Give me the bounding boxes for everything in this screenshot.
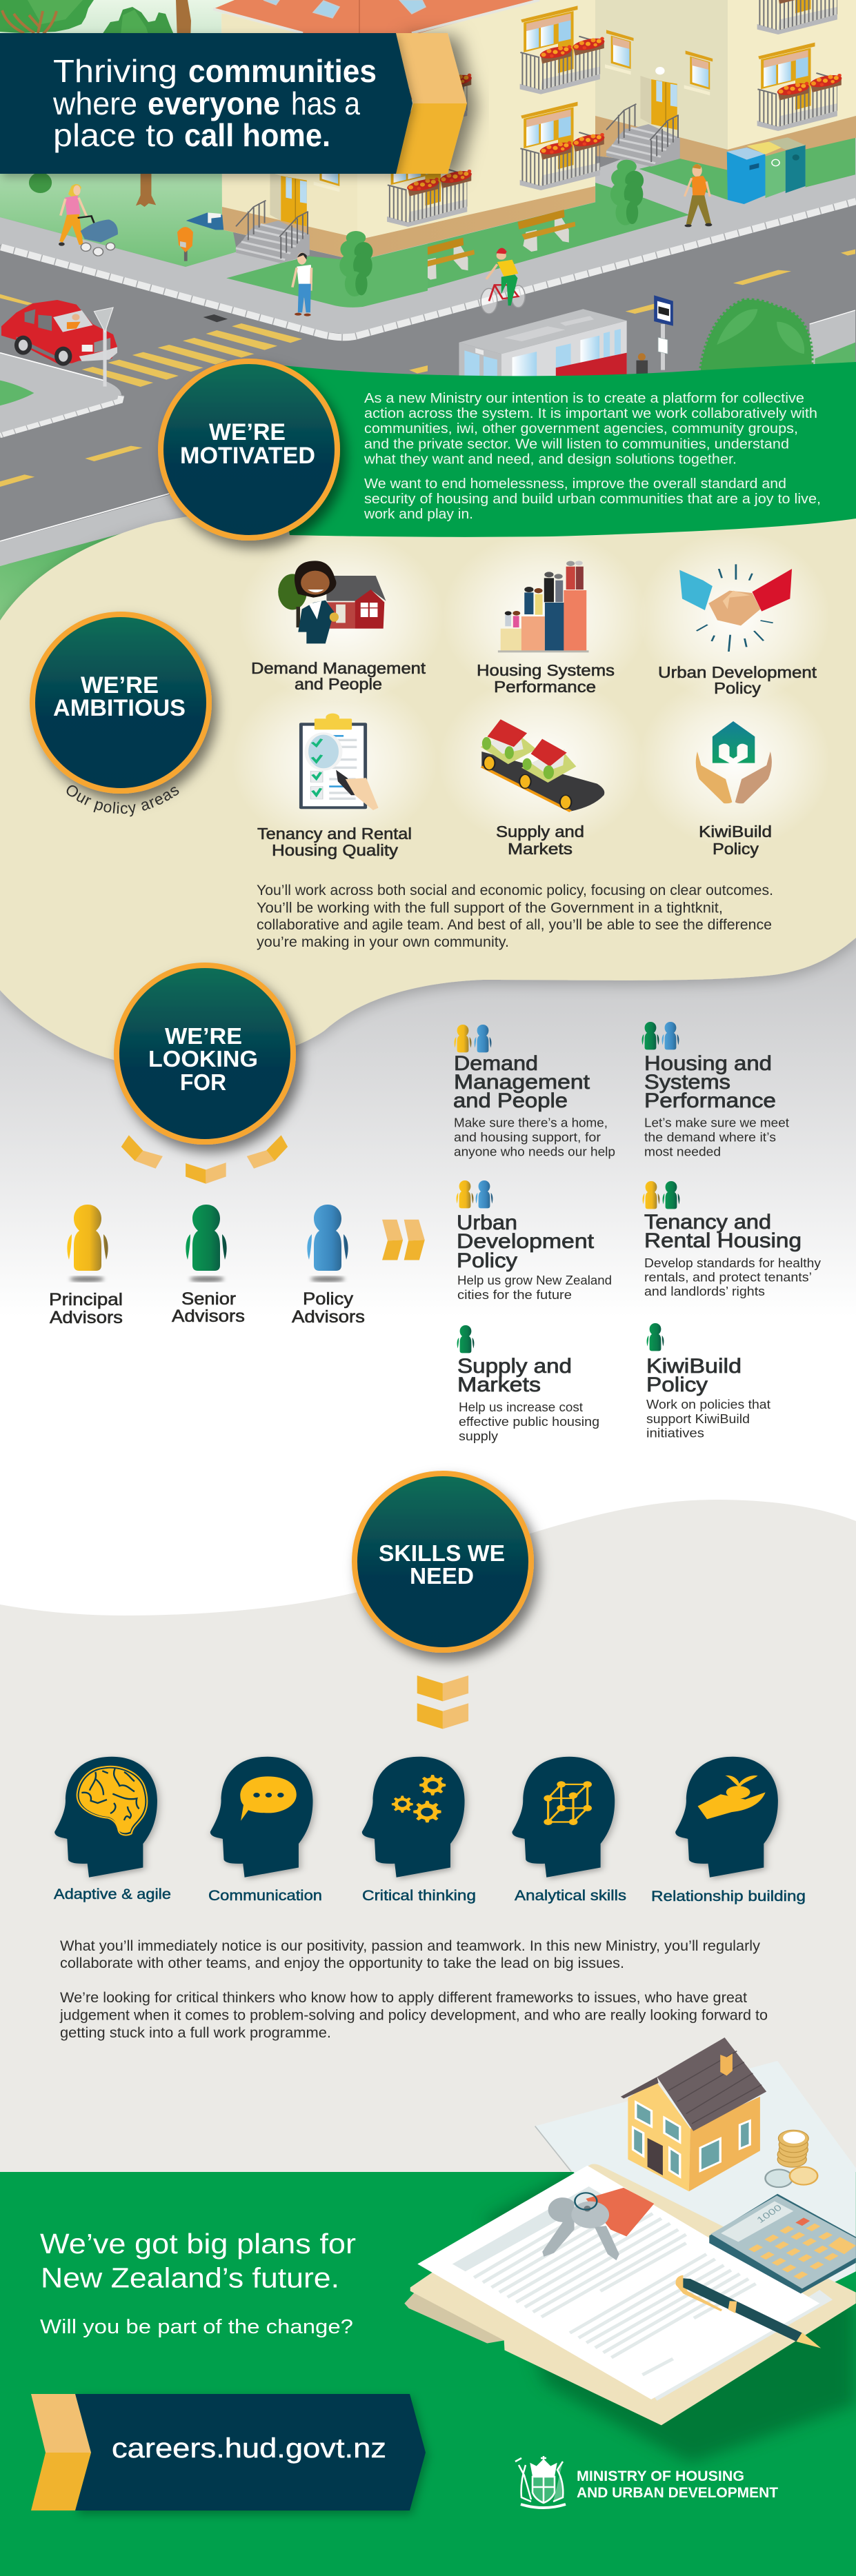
left entrance with steps xyxy=(236,172,310,263)
logo: ministry of housing and urban development xyxy=(515,2456,778,2508)
policy area labels xyxy=(251,659,817,859)
lower-left sidewalk edge xyxy=(0,494,169,541)
street scene illustration xyxy=(0,0,856,566)
motivated body text: what they want and need, and design solutions together. xyxy=(364,452,737,467)
circle: skills we need xyxy=(355,1473,531,1650)
role: demand management and people: anyone who needs our help xyxy=(454,1145,615,1158)
role: kiwibuild policy xyxy=(646,1323,770,1440)
role: tenancy and rental housing: Rental Housing xyxy=(644,1229,802,1252)
icon: clipboard with magnifier xyxy=(299,714,379,810)
skill heads xyxy=(54,1757,778,1878)
house model xyxy=(621,2037,766,2191)
advisor figures xyxy=(67,1205,348,1282)
motivated body text: security of housing and build urban communities that are a joy to live, xyxy=(364,492,821,507)
ambitious body text: you’re making in your own community. xyxy=(257,934,509,950)
skills body text: What you’ll immediately notice is our positivity, passion and teamwork. In this new Ministry, you’ll regularly xyxy=(60,1938,761,1954)
footer text: big plans: Will you be part of the change? xyxy=(40,2316,353,2338)
circle: we're looking for: LOOKING xyxy=(148,1046,258,1071)
advisor labels: Principal xyxy=(49,1290,123,1309)
balconies and windows xyxy=(387,0,843,227)
role: tenancy and rental housing xyxy=(643,1181,821,1298)
folder xyxy=(404,2164,856,2425)
standing man xyxy=(292,252,312,316)
skills body text xyxy=(59,1938,768,2041)
advisor labels: Senior xyxy=(181,1289,236,1309)
illustration: house, keys, documents, calculator xyxy=(404,2037,856,2425)
motivated body text: We want to end homelessness, improve the overall standard and xyxy=(364,476,786,492)
head: molecule cube xyxy=(512,1757,615,1878)
policy area labels: Markets xyxy=(508,840,573,858)
circle: we're ambitious: AMBITIOUS xyxy=(53,695,186,721)
upper sidewalk xyxy=(0,69,856,335)
light grey wave background xyxy=(0,1500,856,2172)
role: housing and systems performance: Performance xyxy=(644,1089,776,1112)
skill labels xyxy=(54,1886,806,1904)
left corner sidewalk xyxy=(0,353,121,438)
policy area labels: Demand Management xyxy=(251,659,426,677)
upper lawn xyxy=(0,174,237,267)
storm grate xyxy=(203,314,228,322)
blue utility hatch xyxy=(186,212,223,230)
circle: we're ambitious xyxy=(32,614,209,791)
role: supply and markets: supply xyxy=(459,1429,498,1443)
head: gears xyxy=(362,1757,465,1878)
ministry wordmark: AND URBAN DEVELOPMENT xyxy=(577,2485,778,2501)
arrows: stacked gold chevrons xyxy=(417,1676,468,1729)
skills body text: We’re looking for critical thinkers who know how to apply different frameworks to issues, who have great xyxy=(60,1990,747,2006)
conifer shrub xyxy=(610,160,644,225)
role: kiwibuild policy: Work on policies that xyxy=(646,1398,770,1411)
head: adaptive xyxy=(54,1757,157,1878)
role: tenancy and rental housing: and landlords’ rights xyxy=(644,1285,765,1298)
advisor labels: Advisors xyxy=(172,1307,245,1326)
role: kiwibuild policy: KiwiBuild xyxy=(646,1355,741,1378)
role: urban development policy: Development xyxy=(457,1230,595,1253)
role: housing and systems performance: Let’s make sure we meet xyxy=(644,1116,789,1129)
banner body xyxy=(0,33,412,174)
role: demand management and people: and People xyxy=(453,1089,568,1112)
scene details right half xyxy=(387,0,855,377)
bus xyxy=(459,309,627,377)
role: urban development policy: Help us grow New Zealand xyxy=(457,1274,612,1287)
conifer shrub xyxy=(339,231,373,296)
ministry wordmark: MINISTRY OF HOUSING xyxy=(577,2468,744,2484)
pale backing sheet xyxy=(535,2061,856,2340)
icon: brain xyxy=(77,1767,147,1835)
skill labels: Adaptive & agile xyxy=(54,1886,171,1902)
tree trunk and shrub xyxy=(29,172,156,207)
far sidewalk xyxy=(810,310,855,377)
role: supply and markets xyxy=(457,1325,599,1443)
role: supply and markets: effective public housing xyxy=(459,1415,599,1429)
banner gold chevron xyxy=(394,33,467,174)
document lines xyxy=(452,2186,756,2375)
curved label: our policy areas: Our policy areas xyxy=(66,785,179,816)
policy area labels: Performance xyxy=(494,678,596,696)
sky and trees behind building xyxy=(0,0,428,41)
figure: policy advisor xyxy=(307,1205,348,1282)
skill labels: Communication xyxy=(208,1888,322,1904)
ministry wordmark xyxy=(577,2468,778,2501)
paper sheets xyxy=(417,2166,833,2401)
figure: senior advisor xyxy=(186,1205,227,1282)
role: urban development policy: Urban xyxy=(457,1211,517,1234)
arrows: three gold chevrons xyxy=(121,1135,288,1184)
arrow: double chevron xyxy=(382,1220,425,1260)
grass strips xyxy=(428,138,855,288)
circle: we're motivated: MOTIVATED xyxy=(180,443,315,469)
ambitious body text: You’ll work across both social and economic policy, focusing on clear outcomes. xyxy=(257,883,773,898)
banner title text: communities xyxy=(188,53,377,89)
policy area labels: Supply and xyxy=(496,823,584,841)
panel: we're ambitious content xyxy=(26,561,817,950)
head: hand with seedling xyxy=(675,1757,778,1878)
role: supply and markets: Help us increase cost xyxy=(459,1400,583,1414)
banner title text xyxy=(52,53,377,153)
role: kiwibuild policy: initiatives xyxy=(646,1426,704,1440)
careers url: careers.hud.govt.nz xyxy=(112,2433,386,2464)
icon: woman with house xyxy=(278,561,386,643)
role: tenancy and rental housing: Tenancy and xyxy=(644,1211,771,1234)
ambitious body text: You’ll be working with the full support of the Government in a tightknit, xyxy=(257,900,723,916)
policy area labels: Policy xyxy=(713,840,759,858)
footer text: big plans: New Zealand’s future. xyxy=(41,2262,339,2293)
role: demand management and people: Demand xyxy=(454,1052,538,1075)
role: urban development policy: cities for the future xyxy=(457,1288,572,1302)
role: kiwibuild policy: support KiwiBuild xyxy=(646,1412,750,1426)
pen xyxy=(676,2275,821,2348)
crest xyxy=(515,2456,566,2508)
red car xyxy=(1,300,117,366)
motivated body text: action across the system. It is important we work collaboratively with xyxy=(364,406,817,421)
circle: we're looking for: FOR xyxy=(180,1069,226,1095)
advisor labels: Advisors xyxy=(50,1308,123,1327)
skills body text: getting stuck into a full work programme. xyxy=(60,2025,331,2041)
skills body text: collaborate with other teams, and enjoy the opportunity to take the lead on big issues. xyxy=(60,1955,624,1971)
grey gradient background behind looking-for section xyxy=(0,924,856,1317)
role: tenancy and rental housing: Develop standards for healthy xyxy=(644,1256,821,1270)
calculator xyxy=(709,2194,856,2293)
building walls xyxy=(221,0,856,261)
left wall window xyxy=(314,147,342,192)
policy area labels: Urban Development xyxy=(658,663,817,681)
circle: we're looking for: WE’RE xyxy=(165,1023,242,1049)
bus stop sign xyxy=(654,295,673,370)
building entrance with steps xyxy=(606,76,680,167)
role: kiwibuild policy: Policy xyxy=(646,1373,708,1396)
role: housing and systems performance xyxy=(642,1022,789,1158)
role: housing and systems performance: most needed xyxy=(644,1145,721,1158)
recycling bins xyxy=(727,137,806,204)
scene details left half xyxy=(0,147,428,541)
panel: we're motivated xyxy=(161,361,856,538)
park benches xyxy=(417,210,575,280)
icon: bars with generations xyxy=(498,561,589,652)
policy area labels: and People xyxy=(295,675,382,693)
calculator: 1000 xyxy=(755,2202,784,2225)
role: demand management and people: Make sure there’s a home, xyxy=(454,1116,608,1129)
role: demand management and people: Management xyxy=(454,1071,590,1094)
policy area labels: KiwiBuild xyxy=(699,823,772,841)
role: demand management and people xyxy=(453,1025,615,1158)
banner body xyxy=(75,2394,426,2510)
green swoosh under the road xyxy=(0,521,179,624)
circle: skills we need: SKILLS WE xyxy=(379,1540,505,1566)
role: urban development policy xyxy=(457,1180,612,1302)
footer text: big plans xyxy=(40,2228,356,2338)
role: urban development policy: Policy xyxy=(457,1249,517,1272)
icon: handshake xyxy=(679,564,792,652)
orange roof xyxy=(213,0,539,50)
role: supply and markets: Markets xyxy=(457,1373,541,1396)
orange litter bin xyxy=(177,227,193,261)
keys xyxy=(542,2193,619,2260)
woman with stroller xyxy=(59,184,118,256)
panel: we're looking for xyxy=(49,965,821,1443)
figure: principal advisor xyxy=(67,1205,108,1282)
policy area labels: Tenancy and Rental xyxy=(257,825,412,843)
circle: we're looking for xyxy=(117,965,293,1142)
banner title text: where xyxy=(52,85,137,121)
ambitious body text xyxy=(257,883,773,950)
curb xyxy=(0,201,856,337)
crosswalk xyxy=(82,323,302,387)
role: demand management and people: and housing support, for xyxy=(454,1131,601,1145)
road dashes left xyxy=(0,294,428,487)
role: supply and markets: Supply and xyxy=(457,1355,572,1378)
cream panel: we're ambitious xyxy=(0,496,856,1068)
waiting person xyxy=(636,353,648,374)
circle: we're ambitious: WE’RE xyxy=(81,672,159,698)
role: housing and systems performance: the demand where it’s xyxy=(644,1131,776,1145)
motivated body text: work and play in. xyxy=(364,507,473,522)
banner title text: has a xyxy=(291,85,360,121)
call to action banner xyxy=(31,2394,426,2510)
policy area labels: Housing Systems xyxy=(477,661,615,679)
title banner xyxy=(0,33,467,174)
motivated body text: and the private sector. We will listen to communities, understand xyxy=(364,437,789,452)
green footer background xyxy=(0,2172,856,2576)
motivated body text xyxy=(364,391,821,522)
banner gold chevron xyxy=(31,2394,91,2510)
icon: houses on conveyor xyxy=(481,719,604,812)
walking man xyxy=(684,164,712,227)
icon glows xyxy=(231,531,831,848)
large round bush xyxy=(700,300,812,372)
banner title text: Thriving xyxy=(53,53,177,89)
green text panel xyxy=(276,362,856,537)
skill labels: Relationship building xyxy=(651,1889,806,1904)
circle: we're motivated: WE’RE xyxy=(209,419,286,445)
icon: kiwibuild hands xyxy=(696,721,772,803)
motivated body text: communities, iwi, other government agencies, community groups, xyxy=(364,421,798,436)
yield sign xyxy=(94,308,113,387)
advisor labels xyxy=(49,1289,365,1327)
advisor labels: Policy xyxy=(303,1289,354,1309)
lower-left sidewalk xyxy=(0,483,228,566)
banner title text: everyone xyxy=(148,85,280,121)
panel: skills we need xyxy=(54,1473,806,2041)
motivated body text: As a new Ministry our intention is to create a platform for collective xyxy=(364,391,804,406)
banner title text: place to xyxy=(53,117,175,153)
head: speech bubble xyxy=(210,1757,313,1878)
skill labels: Critical thinking xyxy=(362,1888,476,1904)
role: housing and systems performance: Systems xyxy=(644,1071,730,1094)
road dashes right xyxy=(626,250,855,314)
skills body text: judgement when it comes to problem-solving and policy development, and who are really looking forward to xyxy=(59,2008,768,2023)
red house keytag xyxy=(586,2188,654,2237)
skill labels: Analytical skills xyxy=(515,1888,626,1904)
road surface xyxy=(0,33,856,564)
cyclist xyxy=(481,248,525,314)
soft shadow on green under documents xyxy=(487,2171,856,2464)
role: tenancy and rental housing: rentals, and protect tenants’ xyxy=(644,1270,812,1284)
coins xyxy=(765,2130,817,2187)
footer text: big plans: We’ve got big plans for xyxy=(40,2228,356,2260)
lower lawn patch xyxy=(226,243,428,308)
policy area labels: Housing Quality xyxy=(272,841,399,859)
role: housing and systems performance: Housing and xyxy=(644,1052,772,1075)
banner title text: call home. xyxy=(184,117,330,153)
advisor labels: Advisors xyxy=(292,1307,365,1327)
circle: we're motivated xyxy=(161,361,337,538)
circle: skills we need: NEED xyxy=(410,1563,474,1589)
policy area labels: Policy xyxy=(714,679,762,697)
ambitious body text: collaborative and agile team. And best of all, you’ll be able to see the difference xyxy=(257,917,772,933)
